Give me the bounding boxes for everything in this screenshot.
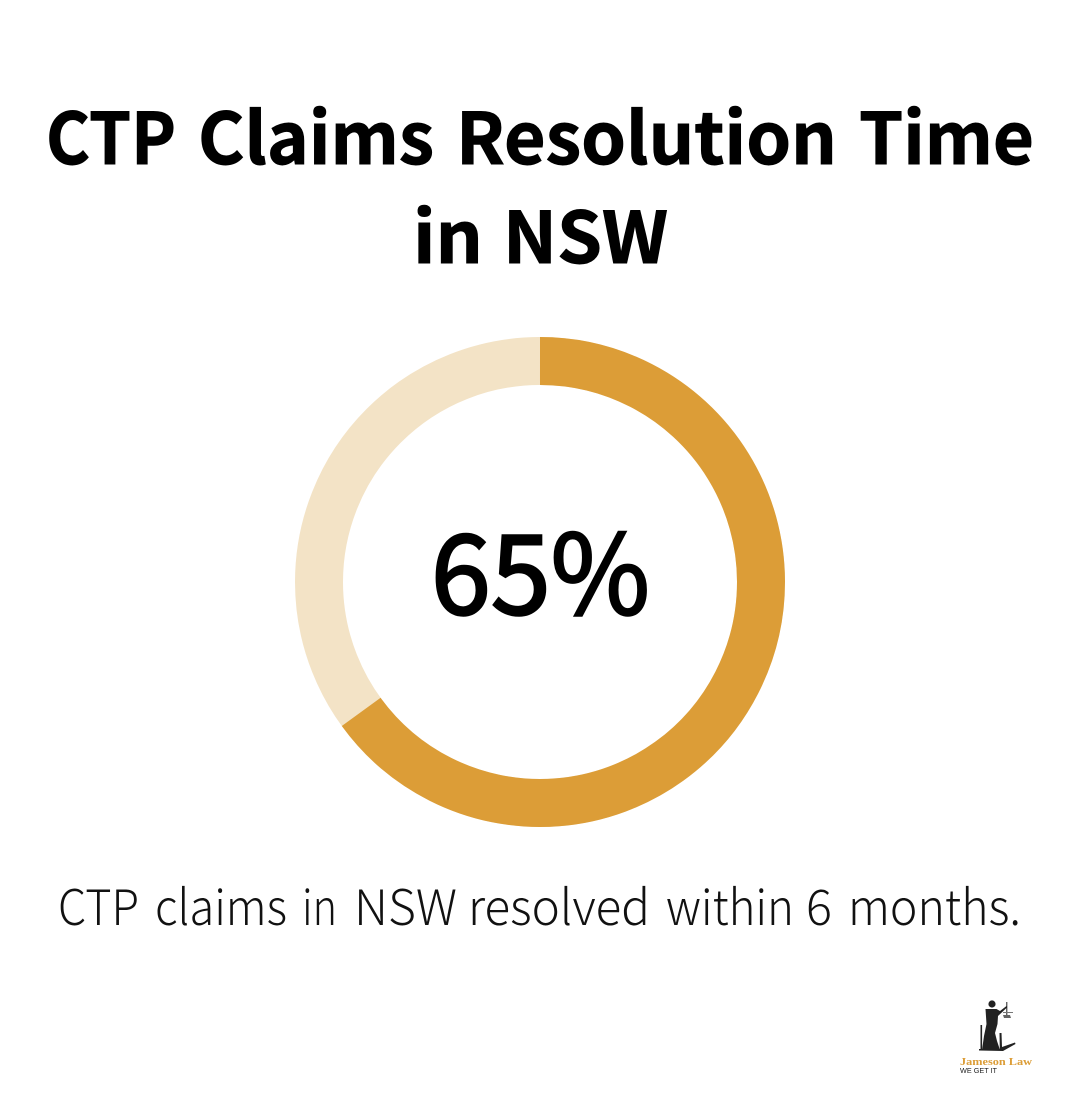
icon: lady justice <box>979 1000 1016 1051</box>
donut chart: 65% <box>319 361 761 803</box>
title: Time <box>859 83 1034 185</box>
title: in <box>413 182 483 284</box>
caption: within <box>666 869 794 940</box>
title: NSW <box>503 182 668 284</box>
title: Claims <box>198 83 434 185</box>
brand name: Jameson Law <box>960 1056 1032 1068</box>
tagline: WE GET IT <box>960 1068 998 1075</box>
caption <box>58 869 1021 940</box>
caption: resolved <box>468 869 650 940</box>
caption: claims <box>155 869 287 940</box>
caption: 6 <box>806 869 832 940</box>
caption: NSW <box>354 869 457 940</box>
center value: 65% <box>431 486 650 646</box>
title: CTP <box>46 83 176 185</box>
title <box>46 83 1034 284</box>
title: Resolution <box>456 83 837 185</box>
caption: months. <box>848 869 1021 940</box>
logo: Jameson Law <box>960 1000 1032 1075</box>
caption: CTP <box>58 869 139 940</box>
caption: in <box>302 869 337 940</box>
